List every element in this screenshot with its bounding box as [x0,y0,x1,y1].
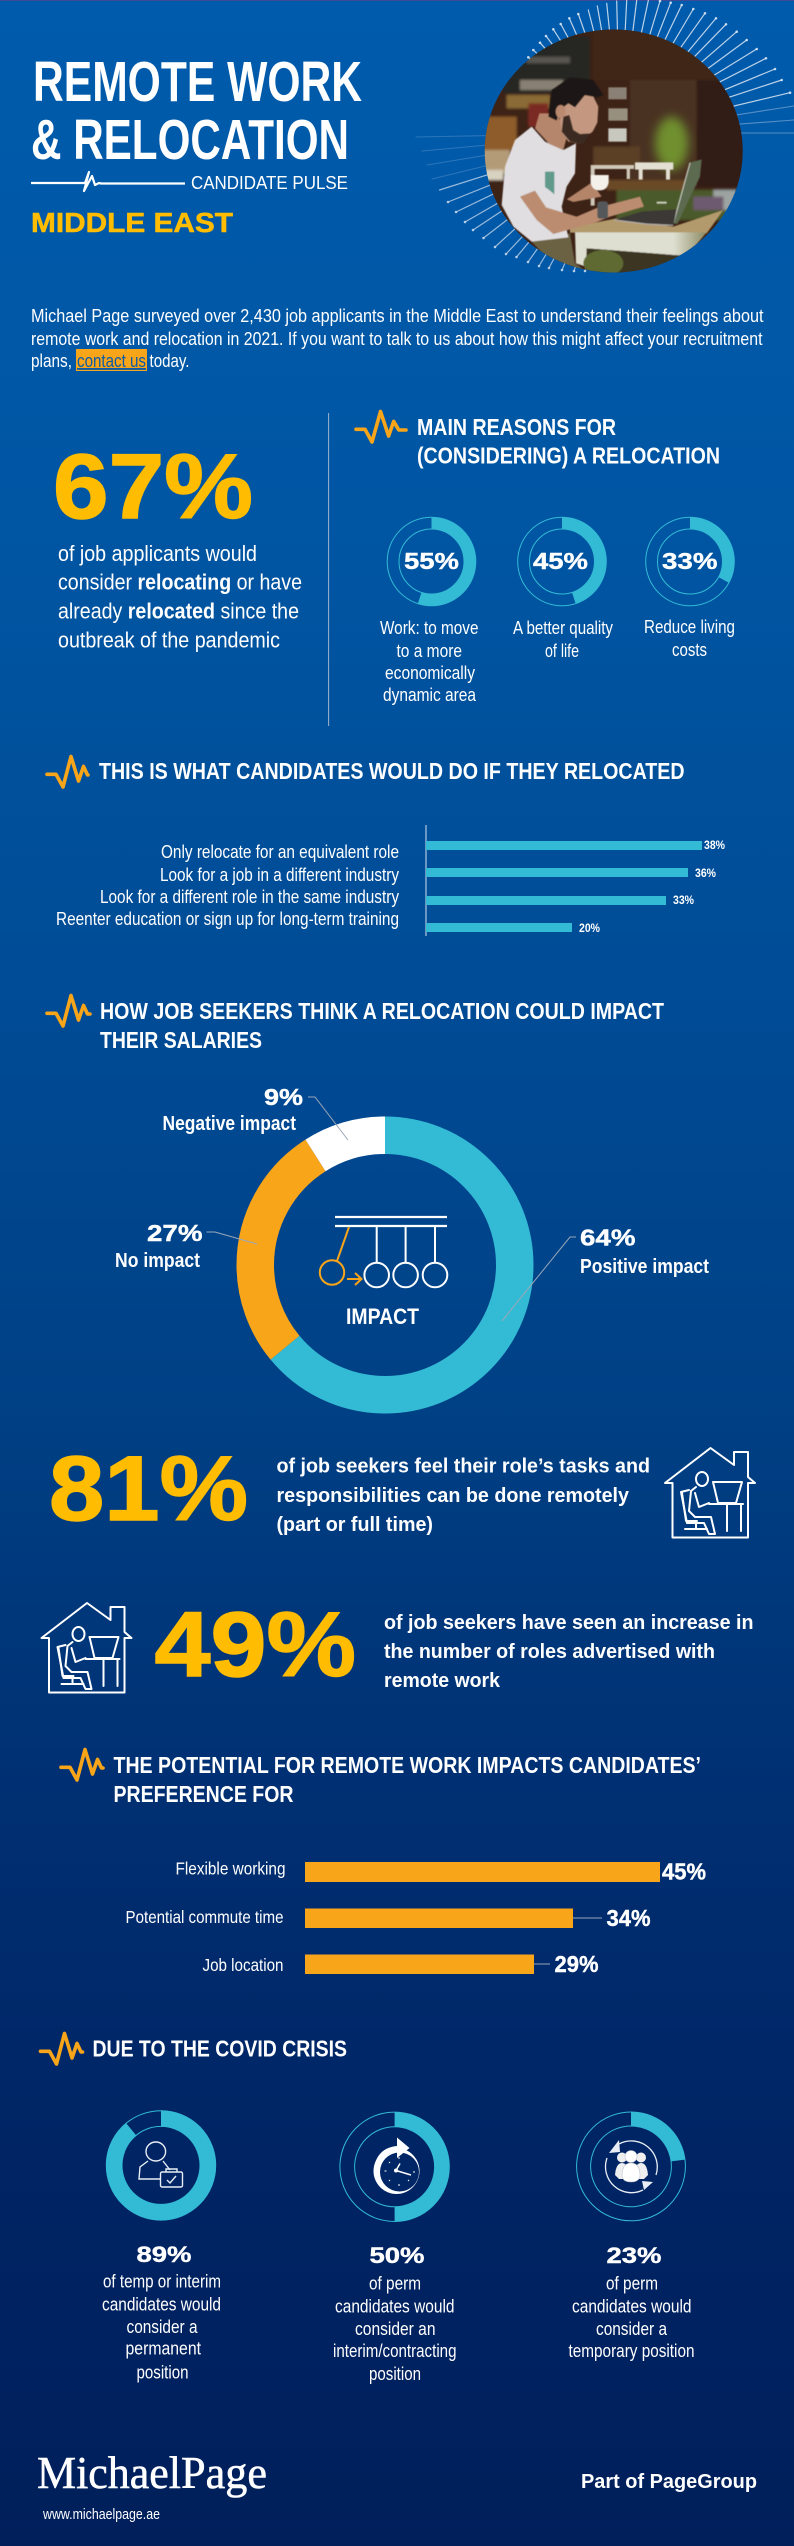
ring: 33%: Reduce living [644,616,735,637]
intro paragraph [31,305,764,371]
stat: 67%: of job applicants would [58,541,257,566]
logo: Michael Page [37,2447,267,2498]
donut centre label: IMPACT [346,1304,419,1329]
stat: 49%: 49% [154,1594,356,1696]
ring: 33%: 33% [662,548,718,574]
bar chart: remote work preference: 34% [606,1905,650,1931]
title: & RELOCATION [31,108,349,172]
shirt [502,127,576,242]
photo: man working on a laptop in a cafe [480,27,747,280]
heading: what candidates would do: THIS IS WHAT CANDIDATES WOULD DO IF THEY RELOCATED [99,758,685,784]
bar chart: what candidates would do: 33% [673,893,694,907]
stat: 67% [53,436,302,652]
ring: 55%: 55% [404,548,459,574]
ring: 89%: position [136,2362,188,2382]
ring: 89%: permanent [126,2338,201,2358]
ring: 23%: consider a [596,2318,668,2339]
second arm [567,183,602,202]
ring: 55% [380,517,478,705]
donut label: 27% no impact [115,1220,202,1272]
ring: 89%: of temp or interim [103,2270,221,2292]
icon: person working from home [42,1603,132,1692]
heading: salary impact: HOW JOB SEEKERS THINK A RELOCATION COULD IMPACT [100,998,664,1024]
ring: 50% [333,2112,456,2384]
heading: what candidates would do [47,756,685,787]
donut label: 64% positive impact: 64% [580,1224,636,1250]
heading: remote work preference [61,1750,701,1807]
ring: 89% [102,2111,221,2382]
neck [535,113,567,150]
frames [608,87,627,99]
stat: 67%: 67% [53,436,253,538]
bar chart: what candidates would do: 38% [704,838,725,852]
bar chart: what candidates would do: Look for a job in a different industry [160,864,400,885]
ring: 55%: dynamic area [383,684,477,705]
heading: main reasons [356,412,720,468]
donut leader lines [206,1097,576,1321]
chairs [635,162,673,180]
stat: 81% [49,1438,650,1540]
ring: 33% [644,517,735,660]
icon: newton's cradle [320,1217,447,1287]
ring: 50%: position [369,2363,421,2384]
bar chart: remote work preference: Job location [202,1955,284,1975]
title: REMOTE WORK [33,50,362,114]
donut label: 64% positive impact: Positive impact [580,1256,709,1278]
ring: 89%: consider a [126,2316,198,2337]
ring: 23%: candidates would [572,2296,692,2316]
ring: 45%: A better quality [513,617,614,638]
candidate pulse strap: CANDIDATE PULSE [191,172,348,193]
donut label: 9% negative impact [162,1084,303,1135]
watch [597,201,608,219]
bar chart: what candidates would do: 20% [579,921,600,935]
bar chart: what candidates would do: 36% [695,866,716,880]
bar chart: remote work preference: Flexible working [176,1858,286,1878]
ring: 55%: Work: to move [380,617,478,638]
ring: 23%: 23% [606,2243,662,2268]
intro paragraph: plans, [31,350,72,371]
table with drawer [570,210,723,233]
ring: 50%: candidates would [335,2296,454,2316]
bar chart: what candidates would do: Reenter education or sign up for long-term training [56,908,399,929]
donut label: 64% positive impact [580,1224,709,1278]
ring: 55%: economically [385,662,476,683]
heading: remote work preference: PREFERENCE FOR [114,1781,294,1807]
ring: 50%: consider an [355,2318,436,2339]
ring: 50%: of perm [369,2272,421,2294]
ring: 89%: 89% [136,2242,192,2267]
icon: person working from home [665,1448,755,1538]
ring: 23% [568,2112,694,2361]
stat: 67%: consider relocating or have [58,570,302,594]
ring: 45%: of life [545,640,579,661]
cup [591,175,609,190]
ring: 50%: 50% [370,2243,424,2268]
heading: covid crisis [40,2034,347,2064]
heading: salary impact: THEIR SALARIES [100,1027,262,1053]
stat: 81%: of job seekers feel their role’s tasks and [276,1456,650,1478]
arm [520,191,644,234]
heading: salary impact [47,996,664,1053]
laptop [673,159,702,224]
trousers [532,233,587,272]
ring: 45% [513,517,614,661]
bar chart: what candidates would do: Only relocate for an equivalent role [161,841,399,862]
icon: clock with arrow [374,2138,420,2194]
hair [548,77,603,121]
region heading: MIDDLE EAST [31,207,233,238]
bar chart: remote work preference: 45% [662,1858,706,1884]
ring: 23%: of perm [606,2272,658,2294]
stat: 49% [154,1594,754,1696]
stat: 81%: (part or full time) [276,1514,433,1536]
heading: main reasons: (CONSIDERING) A RELOCATION [417,442,720,468]
website: www.michaelpage.ae [42,2506,160,2523]
stat: 49%: of job seekers have seen an increase in [384,1612,754,1634]
stat: 49%: remote work [384,1670,501,1692]
donut chart: salary impact [255,1135,515,1395]
bar chart: what candidates would do [56,825,725,936]
stat: 81%: 81% [49,1438,248,1540]
logo: Michael Page: Page [181,2447,267,2498]
bar chart: remote work preference [126,1858,706,1977]
radial rays around photo [416,0,794,271]
intro paragraph: today. [150,350,190,371]
heading: covid crisis: DUE TO THE COVID CRISIS [92,2036,347,2062]
ring: 23%: temporary position [568,2340,694,2361]
heading: remote work preference: THE POTENTIAL FOR REMOTE WORK IMPACTS CANDIDATES’ [114,1752,701,1778]
bar chart: what candidates would do: Look for a different role in the same industry [100,886,400,907]
icon: group with cycle arrows [606,2140,657,2193]
ring: 33%: costs [672,639,707,660]
donut label: 9% negative impact: 9% [264,1084,303,1110]
intro paragraph: contact us [77,350,146,371]
title [31,50,362,172]
logo: Michael Page: Michael [37,2447,181,2498]
stat: 81%: responsibilities can be done remotely [276,1485,630,1507]
ring: 45%: 45% [533,548,588,574]
stat: 49%: the number of roles advertised with [384,1641,715,1663]
bar chart: remote work preference: 29% [554,1951,598,1977]
candidate pulse strap [31,172,348,193]
ring: 50%: interim/contracting [333,2340,456,2361]
stat: 67%: outbreak of the pandemic [58,628,280,652]
donut label: 27% no impact: No impact [115,1250,200,1272]
part of PageGroup: Part of PageGroup [581,2470,757,2493]
icon: person with briefcase [139,2142,182,2187]
ring: 89%: candidates would [102,2294,221,2314]
ring: 55%: to a more [396,640,462,661]
bar chart: remote work preference: Potential commute time [126,1907,284,1927]
stat: 67%: already relocated since the [58,598,299,624]
donut label: 9% negative impact: Negative impact [162,1113,296,1135]
donut label: 27% no impact: 27% [147,1220,202,1246]
heading: main reasons: MAIN REASONS FOR [417,414,616,440]
face [560,93,598,143]
